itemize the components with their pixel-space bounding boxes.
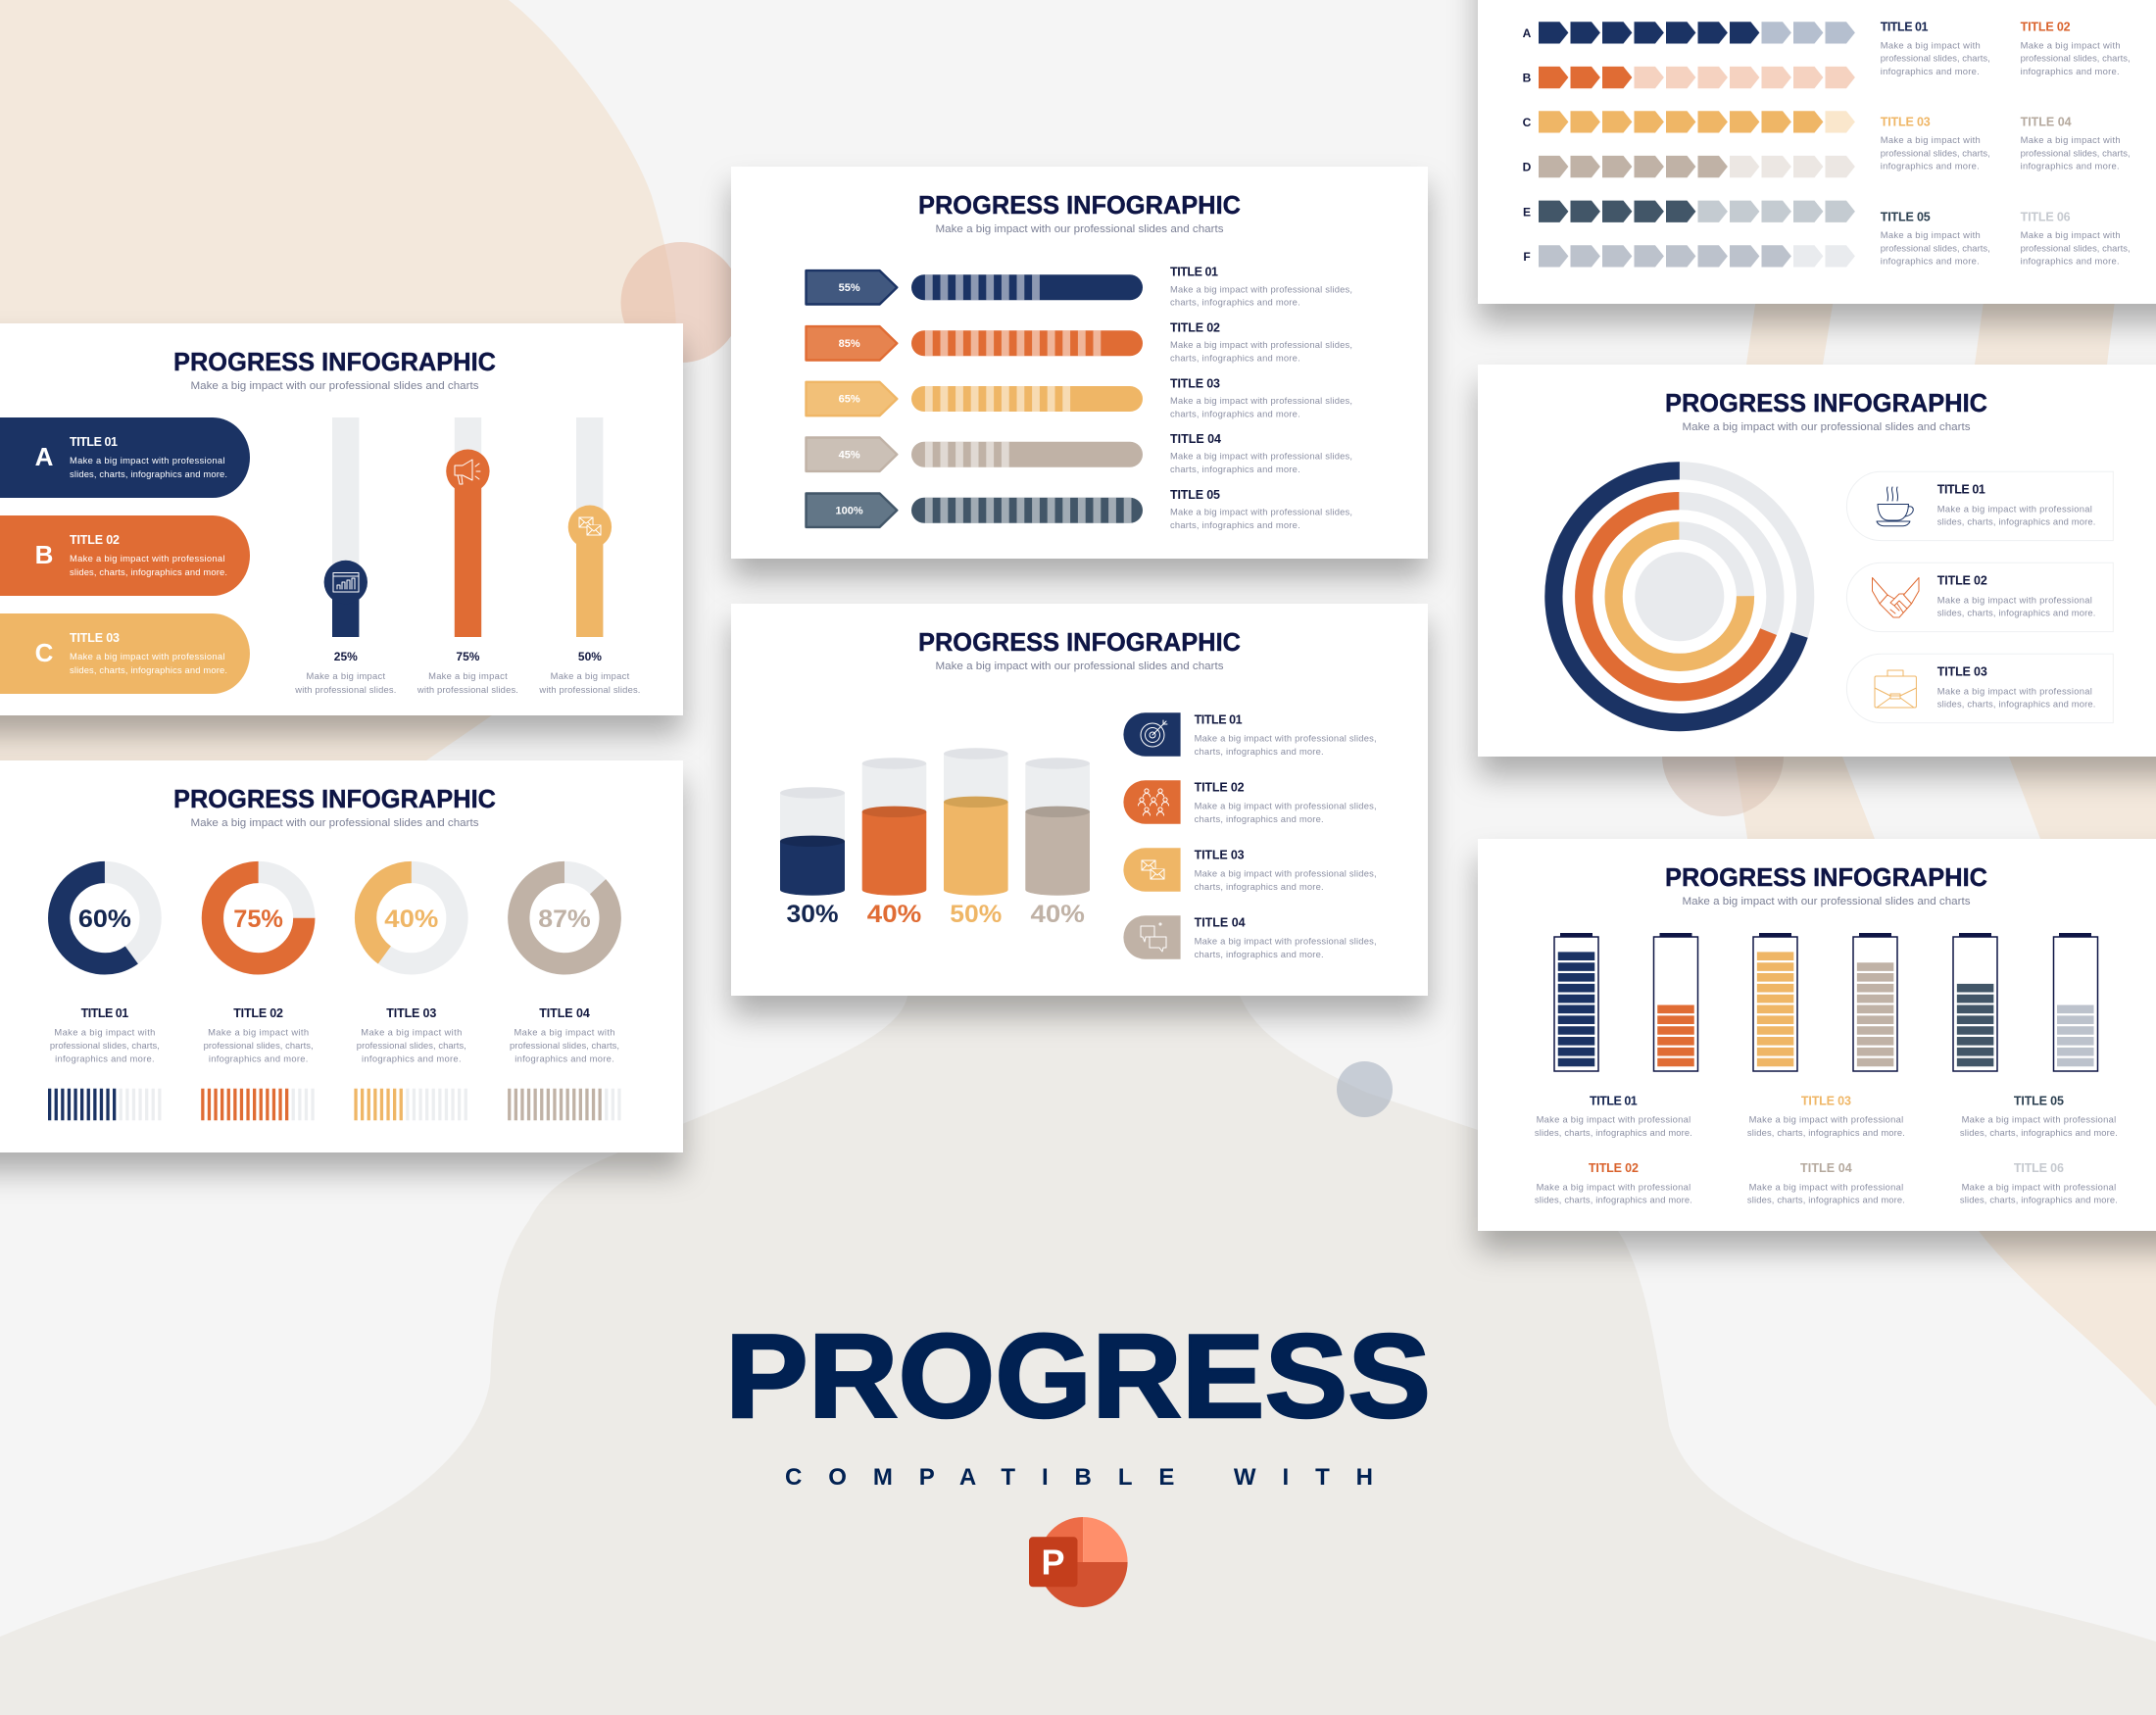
panel heading	[918, 190, 1241, 235]
donut column 60%: 60%	[78, 906, 131, 933]
bar row 65%: 65%	[839, 394, 860, 406]
pill B: B	[35, 540, 53, 569]
icon: envelopes	[579, 517, 601, 535]
panel heading	[918, 627, 1241, 672]
card title 03: Make a big impact with professional	[1937, 685, 2092, 696]
panel: striped progress bars	[731, 167, 1428, 559]
panel: cylinder chart	[731, 604, 1428, 996]
text block title 04	[1747, 1161, 1905, 1205]
text block title 04: Make a big impact with professional	[1749, 1181, 1903, 1192]
donut column 60%: TITLE 01	[81, 1006, 128, 1020]
text block title 03: TITLE 03	[1881, 115, 1931, 128]
legend item 01: TITLE 01	[1195, 712, 1243, 726]
text block title 04	[2021, 115, 2131, 172]
text block title 03: Make a big impact with professional	[1749, 1114, 1903, 1125]
pill C: slides, charts, infographics and more.	[70, 664, 227, 675]
icon: briefcase	[1875, 670, 1916, 708]
donut column 75%	[201, 872, 315, 1104]
chevron row E	[1523, 201, 1855, 222]
background blob: peach top left	[0, 0, 676, 760]
chevron row A: A	[1523, 26, 1532, 40]
bar row 45%: Make a big impact with professional slides,	[1170, 451, 1352, 462]
panel heading: Make a big impact with our professional slides and charts	[1682, 896, 1971, 907]
pill A: A	[35, 442, 54, 471]
panel: concentric rings	[1478, 365, 2156, 757]
text block title 05: professional slides, charts,	[1881, 242, 1990, 253]
bar row 65%: Make a big impact with professional slides,	[1170, 395, 1352, 406]
pill B: Make a big impact with professional	[70, 553, 225, 564]
panel heading: Make a big impact with our professional slides and charts	[190, 817, 479, 829]
chevron row A	[1523, 22, 1855, 43]
donut column 40%: 40%	[384, 906, 438, 933]
cylinder 40% orange: 40%	[867, 901, 921, 928]
chevron row C: C	[1523, 116, 1532, 129]
battery 5	[1953, 933, 1997, 1071]
legend item 04: charts, infographics and more.	[1195, 949, 1324, 959]
panel heading	[173, 784, 496, 829]
legend item 03: TITLE 03	[1195, 848, 1245, 861]
pill A: Make a big impact with professional	[70, 455, 225, 466]
decorative circle: peach top	[621, 242, 741, 363]
text block title 02: infographics and more.	[2021, 66, 2120, 76]
text block title 06: professional slides, charts,	[2021, 242, 2131, 253]
donut column 40%	[348, 854, 475, 1104]
donut column 75%: 75%	[233, 906, 283, 933]
text block title 04: TITLE 04	[2021, 115, 2072, 128]
slider 75%: with professional slides.	[416, 684, 518, 695]
panel: battery charts	[1478, 839, 2156, 1231]
text block title 03: slides, charts, infographics and more.	[1747, 1127, 1905, 1138]
panel heading: PROGRESS INFOGRAPHIC	[173, 347, 496, 376]
panel heading: PROGRESS INFOGRAPHIC	[918, 190, 1241, 220]
bar row 100%: TITLE 05	[1170, 488, 1220, 502]
chevron row F	[1523, 245, 1855, 267]
text block title 02: Make a big impact with	[2021, 39, 2121, 50]
donut column 87%: TITLE 04	[539, 1006, 590, 1020]
text block title 06: TITLE 06	[2014, 1161, 2064, 1175]
card title 01: TITLE 01	[1937, 482, 1985, 496]
panel heading: PROGRESS INFOGRAPHIC	[918, 627, 1241, 657]
text block title 02: Make a big impact with professional	[1537, 1181, 1690, 1192]
bar row 100%: charts, infographics and more.	[1170, 519, 1300, 530]
slider 75%	[416, 417, 518, 695]
donut column 75%: infographics and more.	[209, 1053, 308, 1064]
text block title 03	[1881, 115, 1990, 172]
card title 01: slides, charts, infographics and more.	[1937, 516, 2095, 527]
bar row 85%: charts, infographics and more.	[1170, 353, 1300, 363]
text block title 06	[1960, 1161, 2118, 1205]
text block title 01: infographics and more.	[1881, 66, 1980, 76]
bar row 45%	[806, 432, 1352, 474]
bar row 85%: TITLE 02	[1170, 321, 1220, 335]
panel heading	[173, 347, 496, 392]
legend item 04: Make a big impact with professional slides,	[1195, 936, 1377, 947]
icon: envelopes	[1142, 860, 1164, 879]
donut column 75%: professional slides, charts,	[204, 1040, 314, 1051]
donut column 87%: professional slides, charts,	[510, 1040, 619, 1051]
icon: chart board	[333, 572, 359, 592]
subtitle: compatible with: COMPATIBLE WITH	[785, 1464, 1373, 1491]
text block title 03: professional slides, charts,	[1881, 147, 1990, 158]
legend item 01: charts, infographics and more.	[1195, 746, 1324, 757]
decorative circle: peach right	[1662, 695, 1784, 816]
panel heading: Make a big impact with our professional slides and charts	[935, 223, 1224, 235]
cylinder 30%: 30%	[786, 901, 839, 928]
pill A	[0, 417, 250, 498]
panel background	[1478, 0, 2156, 304]
bar row 45%: TITLE 04	[1170, 432, 1221, 446]
text block title 01: Make a big impact with	[1881, 39, 1981, 50]
panel background	[731, 604, 1428, 996]
text block title 06: Make a big impact with	[2021, 229, 2121, 240]
text block title 06	[2021, 211, 2131, 267]
text block title 04: Make a big impact with	[2021, 134, 2121, 145]
text block title 01: professional slides, charts,	[1881, 53, 1990, 64]
battery 1	[1554, 933, 1598, 1071]
panel: labelled pills and vertical sliders	[0, 323, 683, 715]
legend item 04: TITLE 04	[1195, 915, 1246, 929]
icon: target	[1141, 720, 1167, 747]
panel background	[731, 167, 1428, 559]
chevron row D	[1523, 156, 1855, 177]
legend item 01	[1123, 712, 1377, 757]
icon: coffee cup	[1877, 487, 1913, 526]
bar row 45%: charts, infographics and more.	[1170, 464, 1300, 474]
panel heading	[1665, 388, 1987, 433]
panel heading: PROGRESS INFOGRAPHIC	[1665, 862, 1987, 892]
icon: chat bubbles	[1141, 923, 1166, 952]
donut column 87%: 87%	[538, 906, 591, 933]
card title 02: Make a big impact with professional	[1937, 594, 2092, 605]
panel heading: PROGRESS INFOGRAPHIC	[1665, 388, 1987, 417]
slider 75%: 75%	[456, 650, 480, 663]
text block title 06: TITLE 06	[2021, 211, 2071, 224]
bar row 55%: TITLE 01	[1170, 266, 1218, 279]
panel background	[1478, 365, 2156, 757]
card title 03	[1846, 654, 2113, 723]
text block title 05: Make a big impact with	[1881, 229, 1981, 240]
bar row 55%: Make a big impact with professional slides,	[1170, 283, 1352, 294]
cylinder 40% tan: 40%	[1031, 901, 1085, 928]
pill A: slides, charts, infographics and more.	[70, 468, 227, 479]
icon: PowerPoint logo: P	[1041, 1543, 1065, 1583]
chevron row B	[1523, 67, 1855, 88]
background stripe: peach far right	[1975, 245, 2156, 1406]
radial chart	[1521, 438, 1838, 755]
legend item 02: Make a big impact with professional slides,	[1195, 801, 1377, 811]
icon: PowerPoint logo	[1029, 1517, 1128, 1607]
text block title 06: Make a big impact with professional	[1962, 1181, 2116, 1192]
text block title 04: infographics and more.	[2021, 161, 2120, 172]
text block title 03: Make a big impact with	[1881, 134, 1981, 145]
cylinder 30%	[780, 787, 845, 928]
card title 02: TITLE 02	[1937, 573, 1987, 587]
text block title 04: slides, charts, infographics and more.	[1747, 1195, 1905, 1205]
pill C	[0, 613, 250, 694]
pill C: C	[35, 638, 54, 667]
donut column 40%: professional slides, charts,	[357, 1040, 466, 1051]
legend item 03: Make a big impact with professional slides,	[1195, 868, 1377, 879]
panel background	[0, 760, 683, 1152]
slider 50%: Make a big impact	[551, 670, 630, 681]
legend item 02	[1123, 780, 1377, 824]
donut column 87%	[500, 854, 629, 1104]
legend item 02: charts, infographics and more.	[1195, 813, 1324, 824]
card title 02	[1846, 563, 2113, 632]
legend item 03	[1123, 848, 1377, 892]
donut column 40%: infographics and more.	[362, 1053, 462, 1064]
text block title 05	[1960, 1094, 2118, 1138]
background stripe: peach centre right	[1735, 245, 1875, 882]
pill B	[0, 515, 250, 596]
bar row 55%	[806, 266, 1352, 308]
battery 2	[1654, 933, 1697, 1071]
text block title 01	[1881, 21, 1990, 76]
panel background	[1478, 839, 2156, 1231]
pill C: Make a big impact with professional	[70, 651, 225, 662]
text block title 02: slides, charts, infographics and more.	[1535, 1195, 1692, 1205]
pill B: slides, charts, infographics and more.	[70, 566, 227, 577]
pill A: TITLE 01	[70, 435, 118, 449]
text block title 02: TITLE 02	[1589, 1161, 1639, 1175]
donut column 60%	[41, 854, 169, 1104]
slider 25%: with professional slides.	[294, 684, 396, 695]
text block title 03: TITLE 03	[1801, 1094, 1851, 1107]
text block title 05: slides, charts, infographics and more.	[1960, 1127, 2118, 1138]
text block title 05: TITLE 05	[2014, 1094, 2064, 1107]
panel heading	[1665, 862, 1987, 907]
pill C: TITLE 03	[70, 631, 120, 645]
panel: chevron rows	[1478, 0, 2156, 304]
bar row 85%: Make a big impact with professional slides,	[1170, 339, 1352, 350]
cylinder 50%	[944, 748, 1008, 928]
text block title 06: slides, charts, infographics and more.	[1960, 1195, 2118, 1205]
bar row 65%: charts, infographics and more.	[1170, 408, 1300, 418]
card title 02: slides, charts, infographics and more.	[1937, 608, 2095, 618]
card title 01	[1846, 471, 2113, 541]
icon: handshake	[1872, 578, 1919, 617]
icon: megaphone	[455, 460, 480, 484]
cylinder 50%: 50%	[950, 901, 1002, 928]
text block title 02	[1535, 1161, 1692, 1205]
bar row 45%: 45%	[839, 449, 860, 461]
bar row 100%	[806, 488, 1352, 530]
bar row 65%	[806, 376, 1352, 418]
text block title 05	[1881, 211, 1990, 267]
chevron row C	[1523, 111, 1855, 133]
donut column 60%: Make a big impact with	[54, 1027, 155, 1038]
slider 50%: with professional slides.	[538, 684, 640, 695]
text block title 05: TITLE 05	[1881, 211, 1931, 224]
panel heading: PROGRESS INFOGRAPHIC	[173, 784, 496, 813]
text block title 05: Make a big impact with professional	[1962, 1114, 2116, 1125]
text block title 01: slides, charts, infographics and more.	[1535, 1127, 1692, 1138]
battery 6	[2054, 933, 2097, 1071]
donut column 75%: TITLE 02	[233, 1006, 283, 1020]
main title: PROGRESS	[725, 1309, 1431, 1443]
panel heading: Make a big impact with our professional slides and charts	[190, 380, 479, 392]
text block title 02	[2021, 21, 2131, 76]
chevron row F: F	[1523, 250, 1531, 264]
panel heading: Make a big impact with our professional slides and charts	[935, 661, 1224, 672]
donut column 40%: Make a big impact with	[361, 1027, 462, 1038]
text block title 01	[1535, 1094, 1692, 1138]
legend item 02: TITLE 02	[1195, 780, 1245, 794]
bar row 55%: 55%	[839, 282, 860, 294]
donut column 60%: professional slides, charts,	[50, 1040, 160, 1051]
icon: people	[1139, 789, 1168, 815]
chevron row E: E	[1523, 205, 1531, 219]
card title 01: Make a big impact with professional	[1937, 503, 2092, 514]
slider 25%: 25%	[334, 650, 358, 663]
text block title 05: infographics and more.	[1881, 256, 1980, 267]
card title 03: TITLE 03	[1937, 664, 1987, 678]
bar row 85%: 85%	[839, 338, 860, 350]
panel background	[0, 323, 683, 715]
decorative circle: grey	[1337, 1061, 1393, 1117]
slider 75%: Make a big impact	[428, 670, 508, 681]
card title 03: slides, charts, infographics and more.	[1937, 699, 2095, 710]
text block title 02: professional slides, charts,	[2021, 53, 2131, 64]
slider 25%: Make a big impact	[306, 670, 385, 681]
battery 4	[1853, 933, 1897, 1071]
legend item 04	[1123, 915, 1377, 959]
bar row 65%: TITLE 03	[1170, 376, 1220, 390]
battery 3	[1753, 933, 1797, 1071]
donut column 87%: Make a big impact with	[514, 1027, 615, 1038]
text block title 03	[1747, 1094, 1905, 1138]
text block title 06: infographics and more.	[2021, 256, 2120, 267]
donut column 40%: TITLE 03	[386, 1006, 436, 1020]
chevron row D: D	[1523, 161, 1532, 174]
text block title 01: Make a big impact with professional	[1537, 1114, 1690, 1125]
bar row 85%	[806, 321, 1352, 363]
cylinder 40% orange	[862, 758, 926, 928]
donut column 75%: Make a big impact with	[208, 1027, 309, 1038]
text block title 03: infographics and more.	[1881, 161, 1980, 172]
text block title 01: TITLE 01	[1881, 21, 1928, 34]
panel: donut charts	[0, 760, 683, 1152]
cylinder 40% tan	[1025, 758, 1090, 928]
donut column 60%: infographics and more.	[55, 1053, 155, 1064]
text block title 02: TITLE 02	[2021, 21, 2071, 34]
legend item 01: Make a big impact with professional slides,	[1195, 733, 1377, 744]
text block title 04: TITLE 04	[1800, 1161, 1852, 1175]
text block title 04: professional slides, charts,	[2021, 147, 2131, 158]
legend item 03: charts, infographics and more.	[1195, 881, 1324, 892]
text block title 01: TITLE 01	[1590, 1094, 1638, 1107]
donut column 87%: infographics and more.	[514, 1053, 614, 1064]
bar row 100%: Make a big impact with professional slides,	[1170, 506, 1352, 517]
bar row 55%: charts, infographics and more.	[1170, 297, 1300, 308]
bar row 100%: 100%	[836, 505, 863, 516]
pill B: TITLE 02	[70, 533, 120, 547]
chevron row B: B	[1523, 72, 1532, 85]
slider 50%	[538, 417, 640, 695]
slider 50%: 50%	[578, 650, 602, 663]
background blob: beige lower	[0, 882, 2156, 1715]
slider 25%	[294, 417, 396, 695]
panel heading: Make a big impact with our professional slides and charts	[1682, 421, 1971, 433]
